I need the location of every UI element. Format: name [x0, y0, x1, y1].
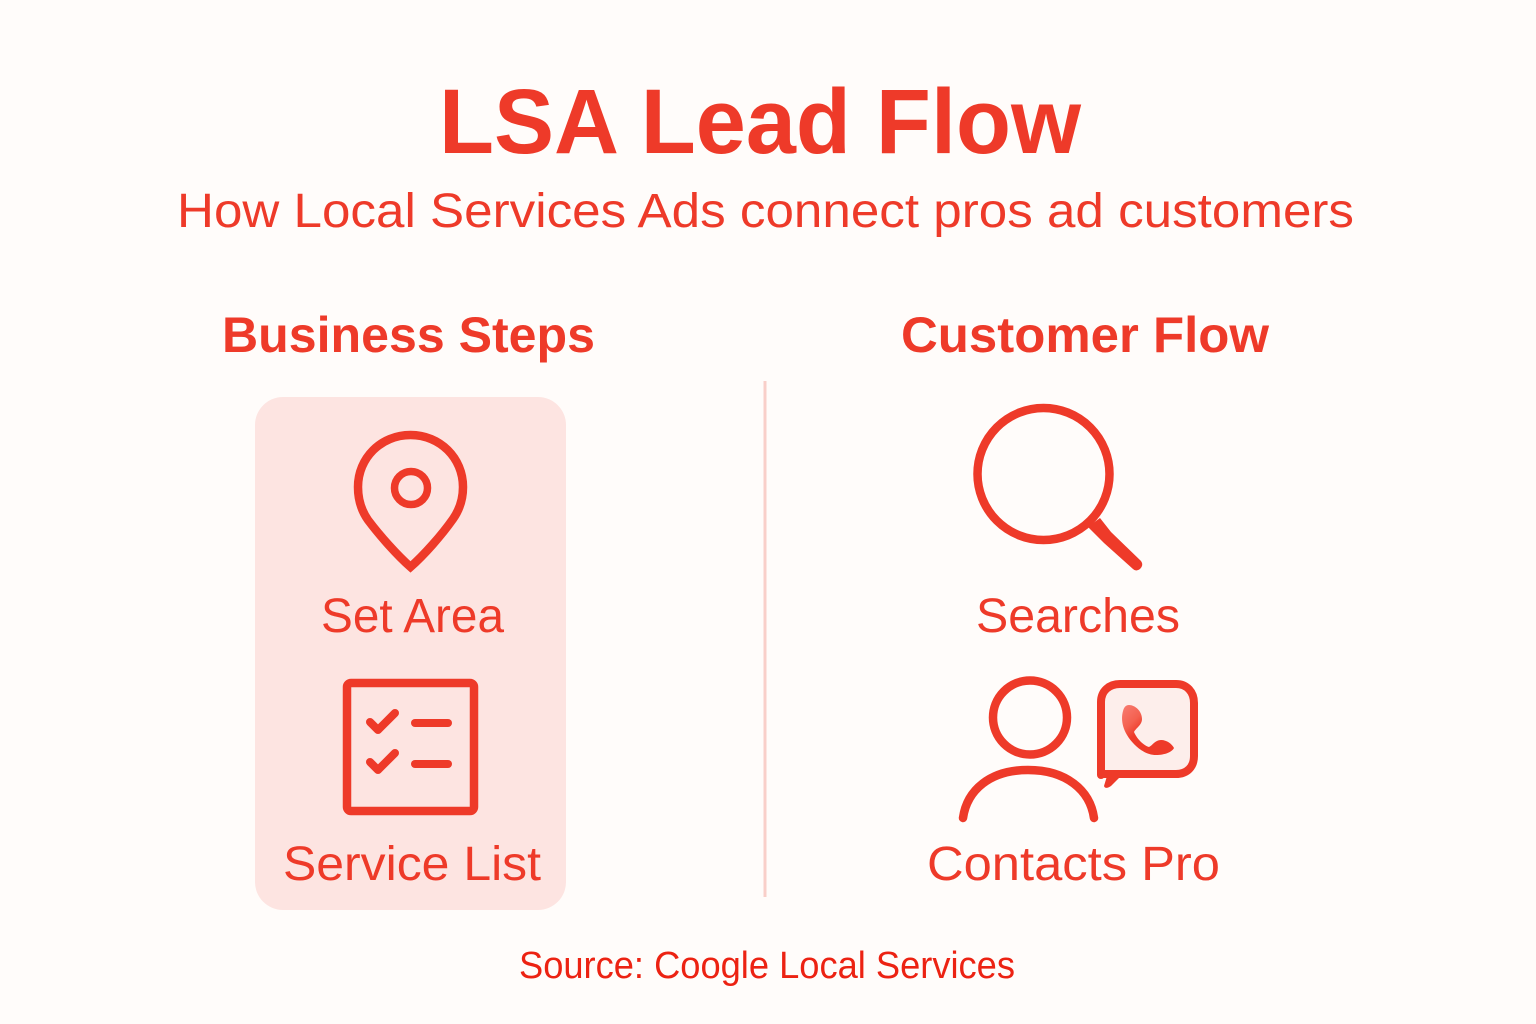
subtitle: How Local Services Ads connect pros ad customers: [177, 185, 1354, 238]
icon: phone speech bubble: [1101, 684, 1194, 788]
heading: customer flow: Customer Flow: [901, 307, 1269, 363]
label: searches: Searches: [976, 590, 1180, 643]
label: service list: Service List: [283, 838, 541, 891]
title: LSA Lead Flow: [439, 71, 1081, 173]
icon: person: [963, 680, 1094, 818]
panel: business steps: [255, 397, 566, 910]
label: contacts pro: Contacts Pro: [927, 838, 1220, 891]
icon: person contacting pro: [963, 680, 1194, 818]
icon: map pin: [358, 435, 463, 567]
heading: business steps: Business Steps: [222, 307, 595, 363]
icon: checklist: [347, 683, 474, 811]
divider: [764, 381, 766, 897]
source note: Source: Coogle Local Services: [519, 945, 1015, 987]
icon: magnifying glass: [978, 408, 1142, 570]
label: set area: Set Area: [321, 590, 504, 643]
